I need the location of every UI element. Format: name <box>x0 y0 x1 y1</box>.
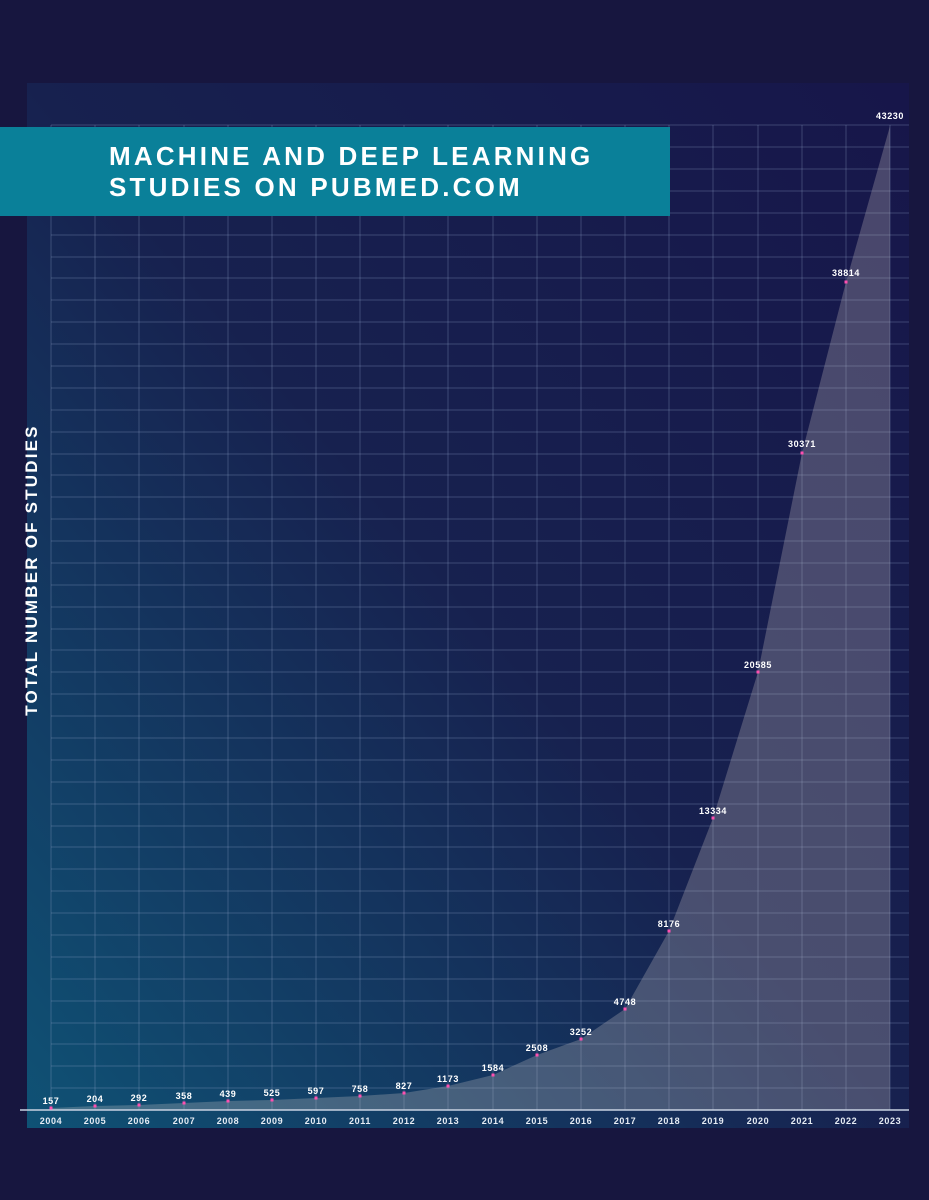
year labels: 2005 <box>84 1116 106 1126</box>
year labels: 2006 <box>128 1116 150 1126</box>
year labels: 2022 <box>835 1116 857 1126</box>
value labels: 439 <box>220 1089 236 1099</box>
title: MACHINE AND DEEP LEARNING <box>109 141 593 171</box>
year labels: 2008 <box>217 1116 239 1126</box>
value labels: 292 <box>131 1093 147 1103</box>
year labels: 2018 <box>658 1116 680 1126</box>
year labels: 2012 <box>393 1116 415 1126</box>
y axis label: TOTAL NUMBER OF STUDIES <box>22 424 41 716</box>
value labels: 1173 <box>437 1074 459 1084</box>
data points <box>50 280 848 1110</box>
value labels: 2508 <box>526 1043 548 1053</box>
axis line <box>20 1109 909 1111</box>
value labels: 43230 <box>876 111 904 121</box>
value labels: 30371 <box>788 439 816 449</box>
year labels: 2004 <box>40 1116 62 1126</box>
value labels: 358 <box>176 1091 192 1101</box>
year labels: 2020 <box>747 1116 769 1126</box>
value labels: 13334 <box>699 806 727 816</box>
year labels: 2011 <box>349 1116 371 1126</box>
year labels: 2019 <box>702 1116 724 1126</box>
value labels: 20585 <box>744 660 772 670</box>
title <box>109 141 593 202</box>
year labels: 2007 <box>173 1116 195 1126</box>
year labels: 2009 <box>261 1116 283 1126</box>
year labels: 2010 <box>305 1116 327 1126</box>
year labels: 2016 <box>570 1116 592 1126</box>
value labels: 157 <box>43 1096 59 1106</box>
value labels: 8176 <box>658 919 680 929</box>
year labels <box>40 1116 901 1126</box>
value labels: 597 <box>308 1086 324 1096</box>
value labels: 3252 <box>570 1027 592 1037</box>
year labels: 2014 <box>482 1116 504 1126</box>
year labels: 2021 <box>791 1116 813 1126</box>
area series <box>51 126 890 1110</box>
title banner <box>0 127 670 216</box>
value labels: 827 <box>396 1081 412 1091</box>
year labels: 2013 <box>437 1116 459 1126</box>
value labels: 4748 <box>614 997 636 1007</box>
year labels: 2017 <box>614 1116 636 1126</box>
title: STUDIES ON PUBMED.COM <box>109 172 523 202</box>
value labels: 38814 <box>832 268 860 278</box>
value labels: 1584 <box>482 1063 504 1073</box>
value labels: 204 <box>87 1094 103 1104</box>
value labels <box>43 111 904 1106</box>
year labels: 2023 <box>879 1116 901 1126</box>
year labels: 2015 <box>526 1116 548 1126</box>
value labels: 525 <box>264 1088 280 1098</box>
value labels: 758 <box>352 1084 368 1094</box>
